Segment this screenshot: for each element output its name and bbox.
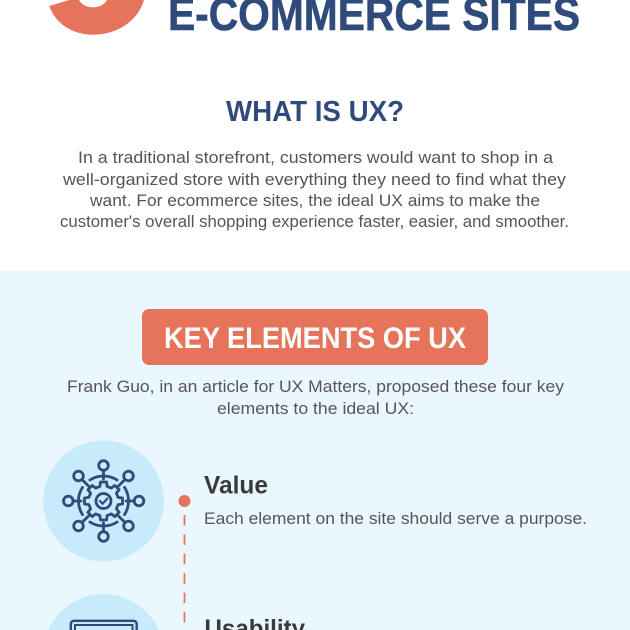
- icon: usability monitor: [48, 594, 159, 630]
- text block: UX definition: want. For ecommerce sites, the ideal UX aims to make the: [89, 191, 540, 210]
- item: value: Value: [204, 472, 268, 500]
- item: value: [204, 472, 587, 528]
- text block: introduction: [67, 377, 565, 418]
- item: value: Each element on the site should serve a purpose.: [204, 509, 587, 528]
- text block: UX definition: In a traditional storefront, customers would want to shop in a: [78, 148, 554, 167]
- panel: key elements: [0, 271, 630, 630]
- heading button: key elements of UX: [142, 309, 488, 365]
- text block: UX definition: customer's overall shopping experience faster, easier, and smoother.: [60, 212, 569, 231]
- heading: what is UX: WHAT IS UX?: [226, 96, 404, 128]
- text block: UX definition: well-organized store with everything they need to find what they: [62, 170, 567, 189]
- text block: introduction: elements to the ideal UX:: [217, 399, 414, 418]
- icon: value gear network: [43, 440, 164, 562]
- text block: introduction: Frank Guo, in an article for UX Matters, proposed these four key: [67, 377, 565, 396]
- icon: large number 5 fragment: [49, 0, 144, 35]
- text block: UX definition: [60, 148, 569, 231]
- timeline connector: [178, 495, 190, 630]
- heading button: key elements of UX: KEY ELEMENTS OF UX: [164, 322, 466, 355]
